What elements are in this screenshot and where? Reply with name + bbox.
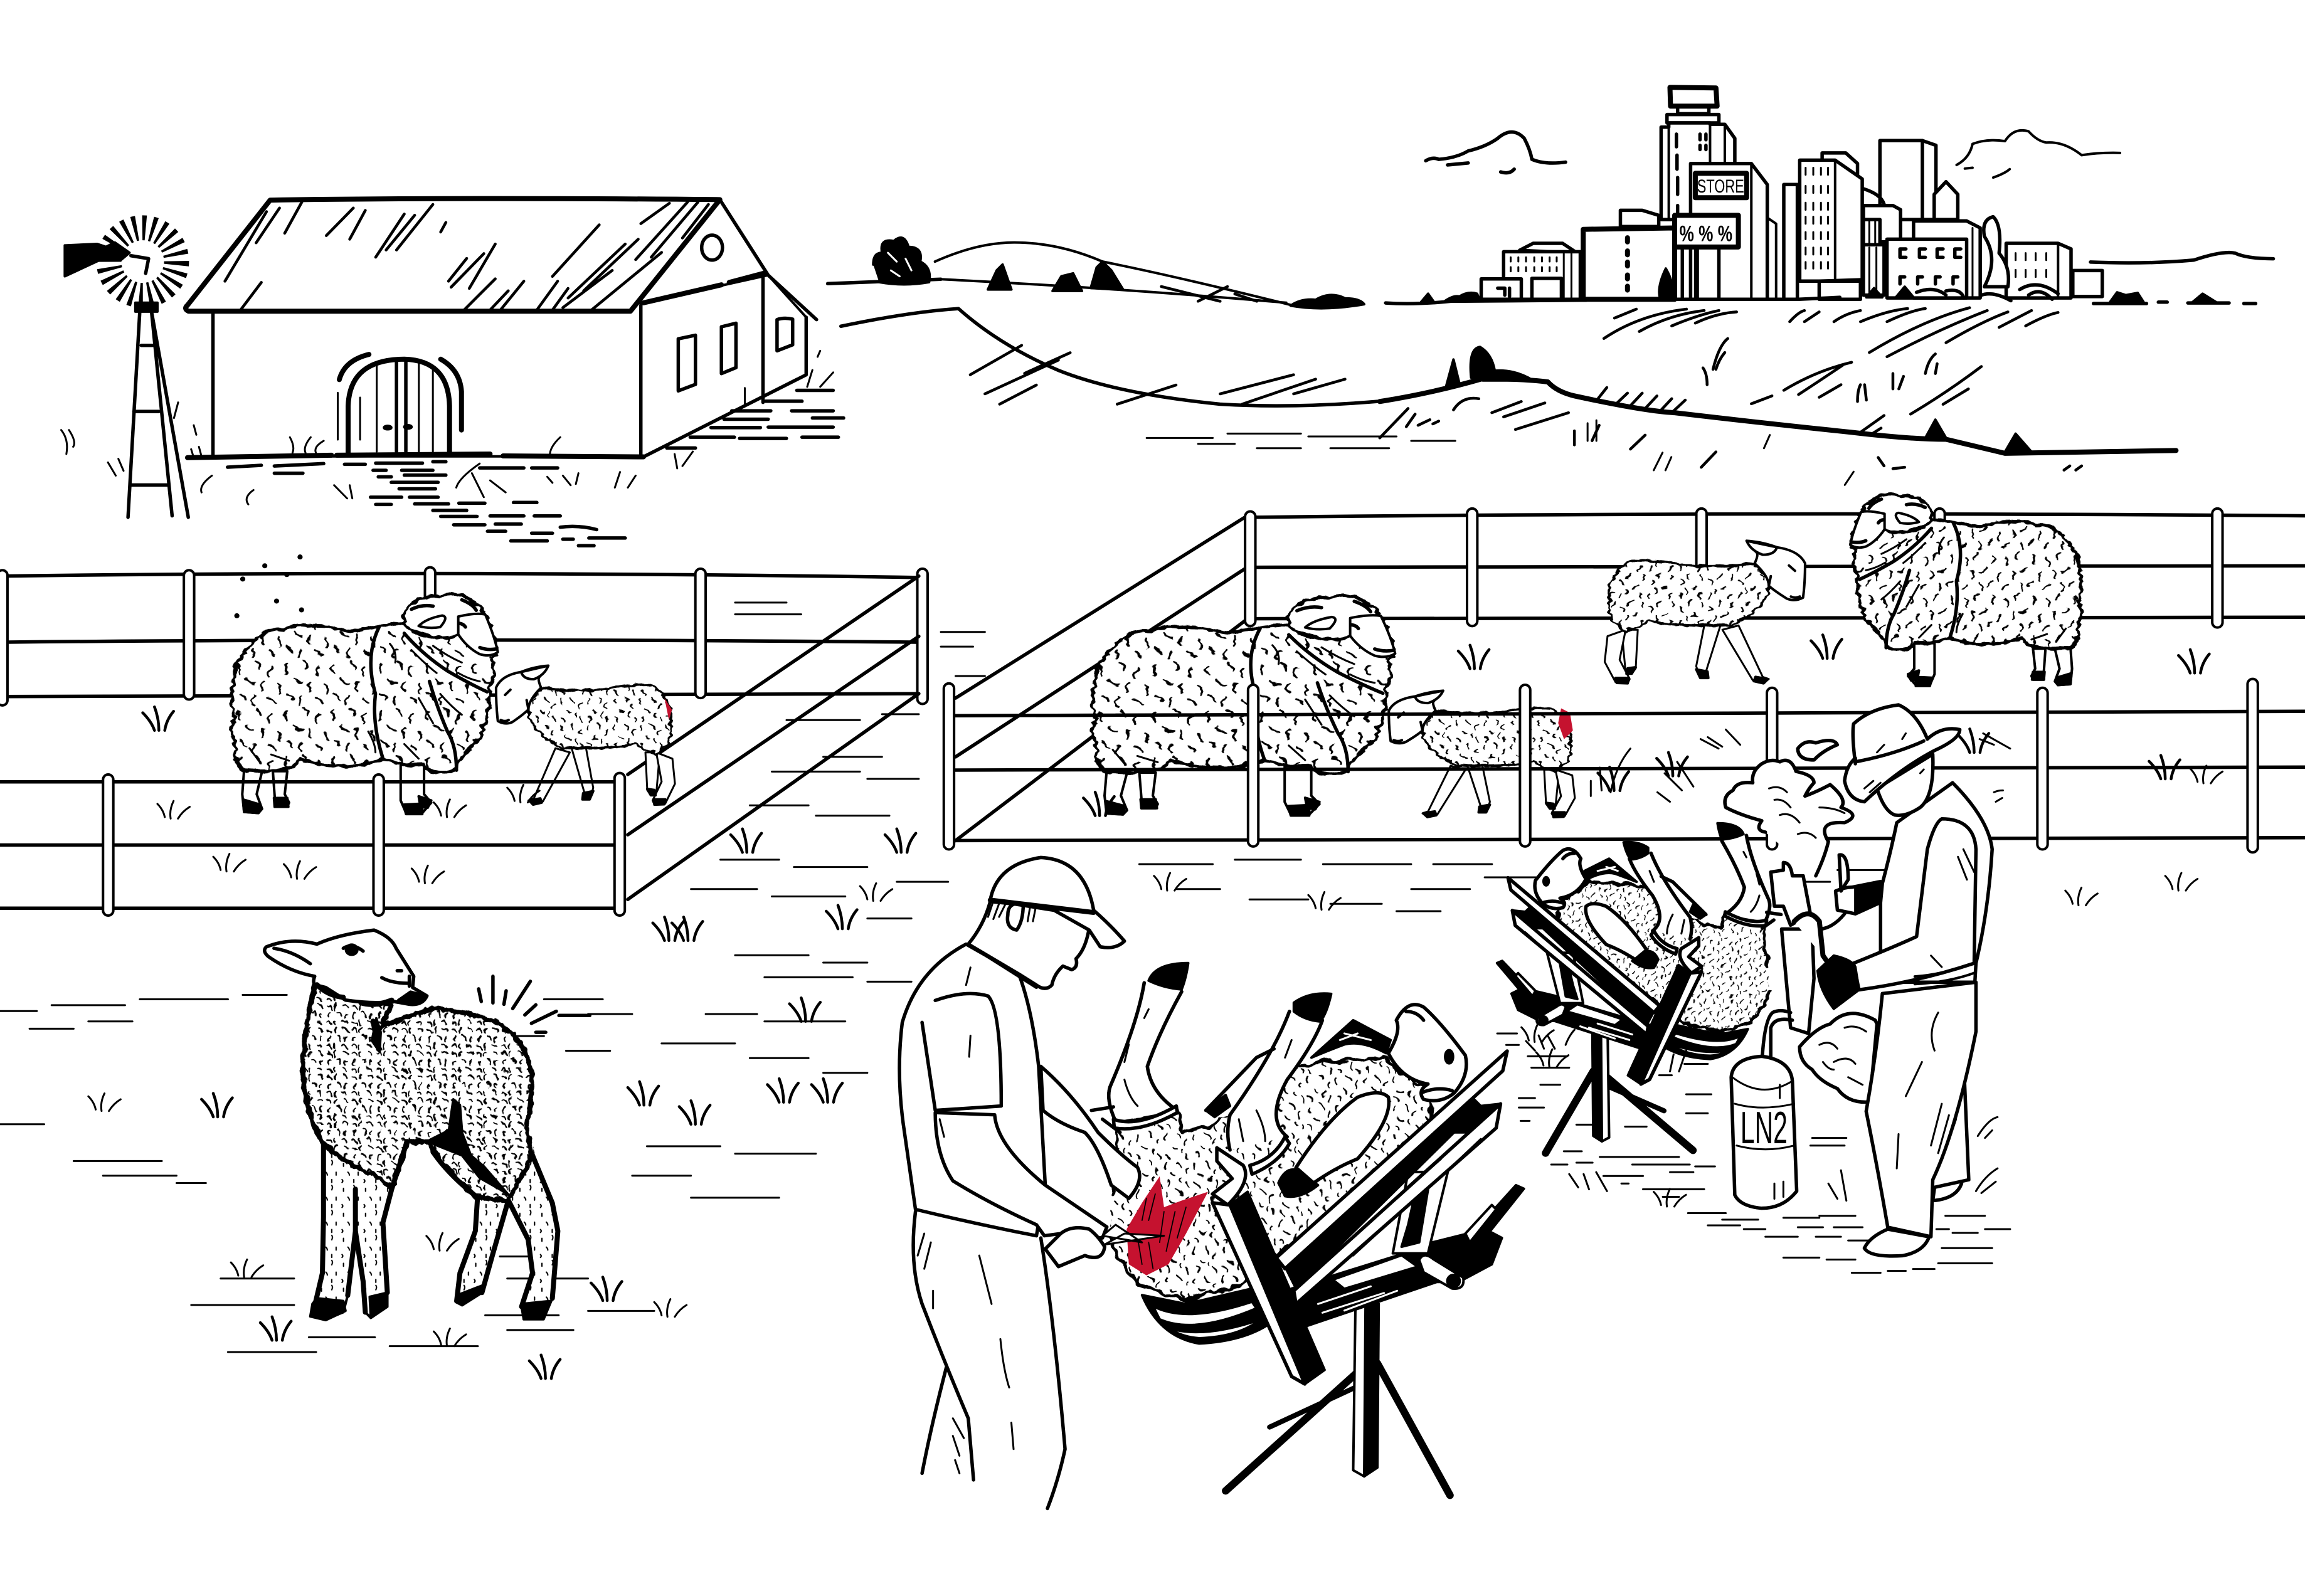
reaching arm — [1041, 1067, 1140, 1198]
cap — [990, 857, 1125, 948]
forearm — [935, 1112, 1107, 1238]
pants — [913, 1212, 1065, 1508]
store building — [1690, 164, 1776, 299]
lamb legs — [312, 1128, 558, 1319]
city shrubs and ground — [1386, 268, 2255, 304]
windmill wheel — [109, 228, 176, 295]
flies above sheep — [237, 557, 302, 616]
left pen back posts — [0, 568, 928, 706]
lamb hooves — [310, 1286, 550, 1320]
right pen front fence — [944, 679, 2305, 852]
lamb head — [265, 930, 427, 1005]
clothing creases — [918, 968, 1014, 1473]
store sign box — [1695, 173, 1747, 198]
head — [968, 902, 1094, 988]
sleeve — [922, 993, 1001, 1111]
big sheep in right pen — [1093, 596, 1395, 815]
LN2 tank label: LN2 — [1741, 1102, 1788, 1153]
foreground lamb — [265, 930, 590, 1320]
hose — [1762, 1011, 1793, 1068]
back right lamb — [1604, 541, 1805, 684]
lamb outline — [312, 1141, 558, 1315]
left pen front fence — [0, 773, 625, 916]
round gable window — [702, 235, 723, 260]
roof hatching — [225, 202, 708, 310]
hand and shears — [1046, 1228, 1105, 1267]
billboard — [1675, 215, 1739, 297]
low left building — [1583, 210, 1675, 299]
small cradle with sheep — [1497, 823, 1781, 1153]
windmill tail — [65, 243, 129, 277]
windmill tower — [128, 303, 188, 517]
ridge line — [1380, 379, 2176, 453]
barn walls — [213, 275, 806, 457]
farmer foot — [1864, 1229, 1929, 1256]
barn side windows — [678, 319, 793, 391]
ear and hair — [1007, 904, 1023, 930]
ridge bushes — [1446, 347, 2032, 452]
right buildings — [1863, 189, 2102, 298]
shearing man — [899, 857, 1524, 1508]
cowboy hat — [1845, 705, 1960, 801]
smoke swirls — [1769, 787, 1845, 838]
farmer ground dashes — [1497, 1033, 2010, 1273]
main tower with roof sign — [1661, 87, 1735, 219]
cloud right — [1957, 130, 2120, 177]
red shorn patch — [1126, 1176, 1208, 1276]
percent billboard text: % % % — [1680, 221, 1732, 246]
left pen gate diagonals — [628, 576, 919, 899]
lamb with red mark in right pen — [1389, 690, 1575, 817]
farmer with LN2 tank — [1497, 705, 2010, 1273]
smoke puff — [1798, 741, 1837, 760]
barn — [61, 199, 844, 546]
back right ram — [1850, 494, 2081, 686]
barn grass — [61, 351, 833, 504]
LN2 tank — [1731, 1056, 1797, 1208]
red mark on lamb — [664, 698, 672, 720]
cloud left — [1426, 132, 1566, 173]
lamb body wool — [302, 985, 533, 1200]
left lamb — [496, 666, 675, 805]
far left buildings — [1481, 243, 1581, 299]
far right hill — [2090, 253, 2274, 263]
city skyline — [1380, 87, 2274, 470]
farmer legs — [1933, 1054, 1969, 1201]
ground dashes — [0, 603, 1889, 1352]
distant hills and trees — [828, 238, 1380, 406]
left big sheep — [232, 595, 498, 814]
windmill — [65, 228, 188, 517]
lamb face details — [274, 944, 508, 1195]
grip handle — [1794, 914, 1828, 963]
farmer arm — [1853, 819, 1976, 990]
grass tufts — [88, 635, 2223, 1378]
windmill hub — [131, 256, 149, 273]
farmer head — [1877, 754, 1933, 815]
tool head — [1771, 862, 1810, 925]
man body — [899, 857, 1164, 1508]
barn door — [337, 354, 462, 453]
farmer clothing creases — [1897, 769, 1974, 1168]
farmer grass — [1526, 729, 2010, 1201]
field furrows — [1380, 308, 2082, 470]
shirt — [899, 944, 1046, 1236]
left pen back fence rails — [0, 573, 922, 697]
mid building right — [1784, 160, 1862, 299]
smoke cloud top — [1725, 760, 1853, 876]
other hand with trigger — [1821, 855, 1880, 929]
black glove — [1818, 956, 1859, 1009]
tank bands — [1732, 1077, 1794, 1199]
belt — [1915, 963, 1975, 984]
farmer torso — [1880, 783, 1992, 982]
tall rear towers — [1880, 140, 1936, 219]
sparkle lines — [479, 976, 590, 1032]
cradle with sheep — [1091, 963, 1524, 1495]
red mark — [1558, 709, 1573, 739]
lower smoke cloud — [1799, 1013, 1877, 1102]
barn roof — [186, 199, 720, 311]
upper field dashes — [1147, 420, 1853, 485]
right pen back fence — [955, 509, 2305, 840]
STORE sign text: STORE — [1697, 176, 1744, 197]
barn outline — [213, 199, 817, 457]
tool flask — [1781, 929, 1814, 1033]
barn ground dashes — [228, 391, 844, 546]
lower smoke curls — [1820, 1027, 1866, 1085]
